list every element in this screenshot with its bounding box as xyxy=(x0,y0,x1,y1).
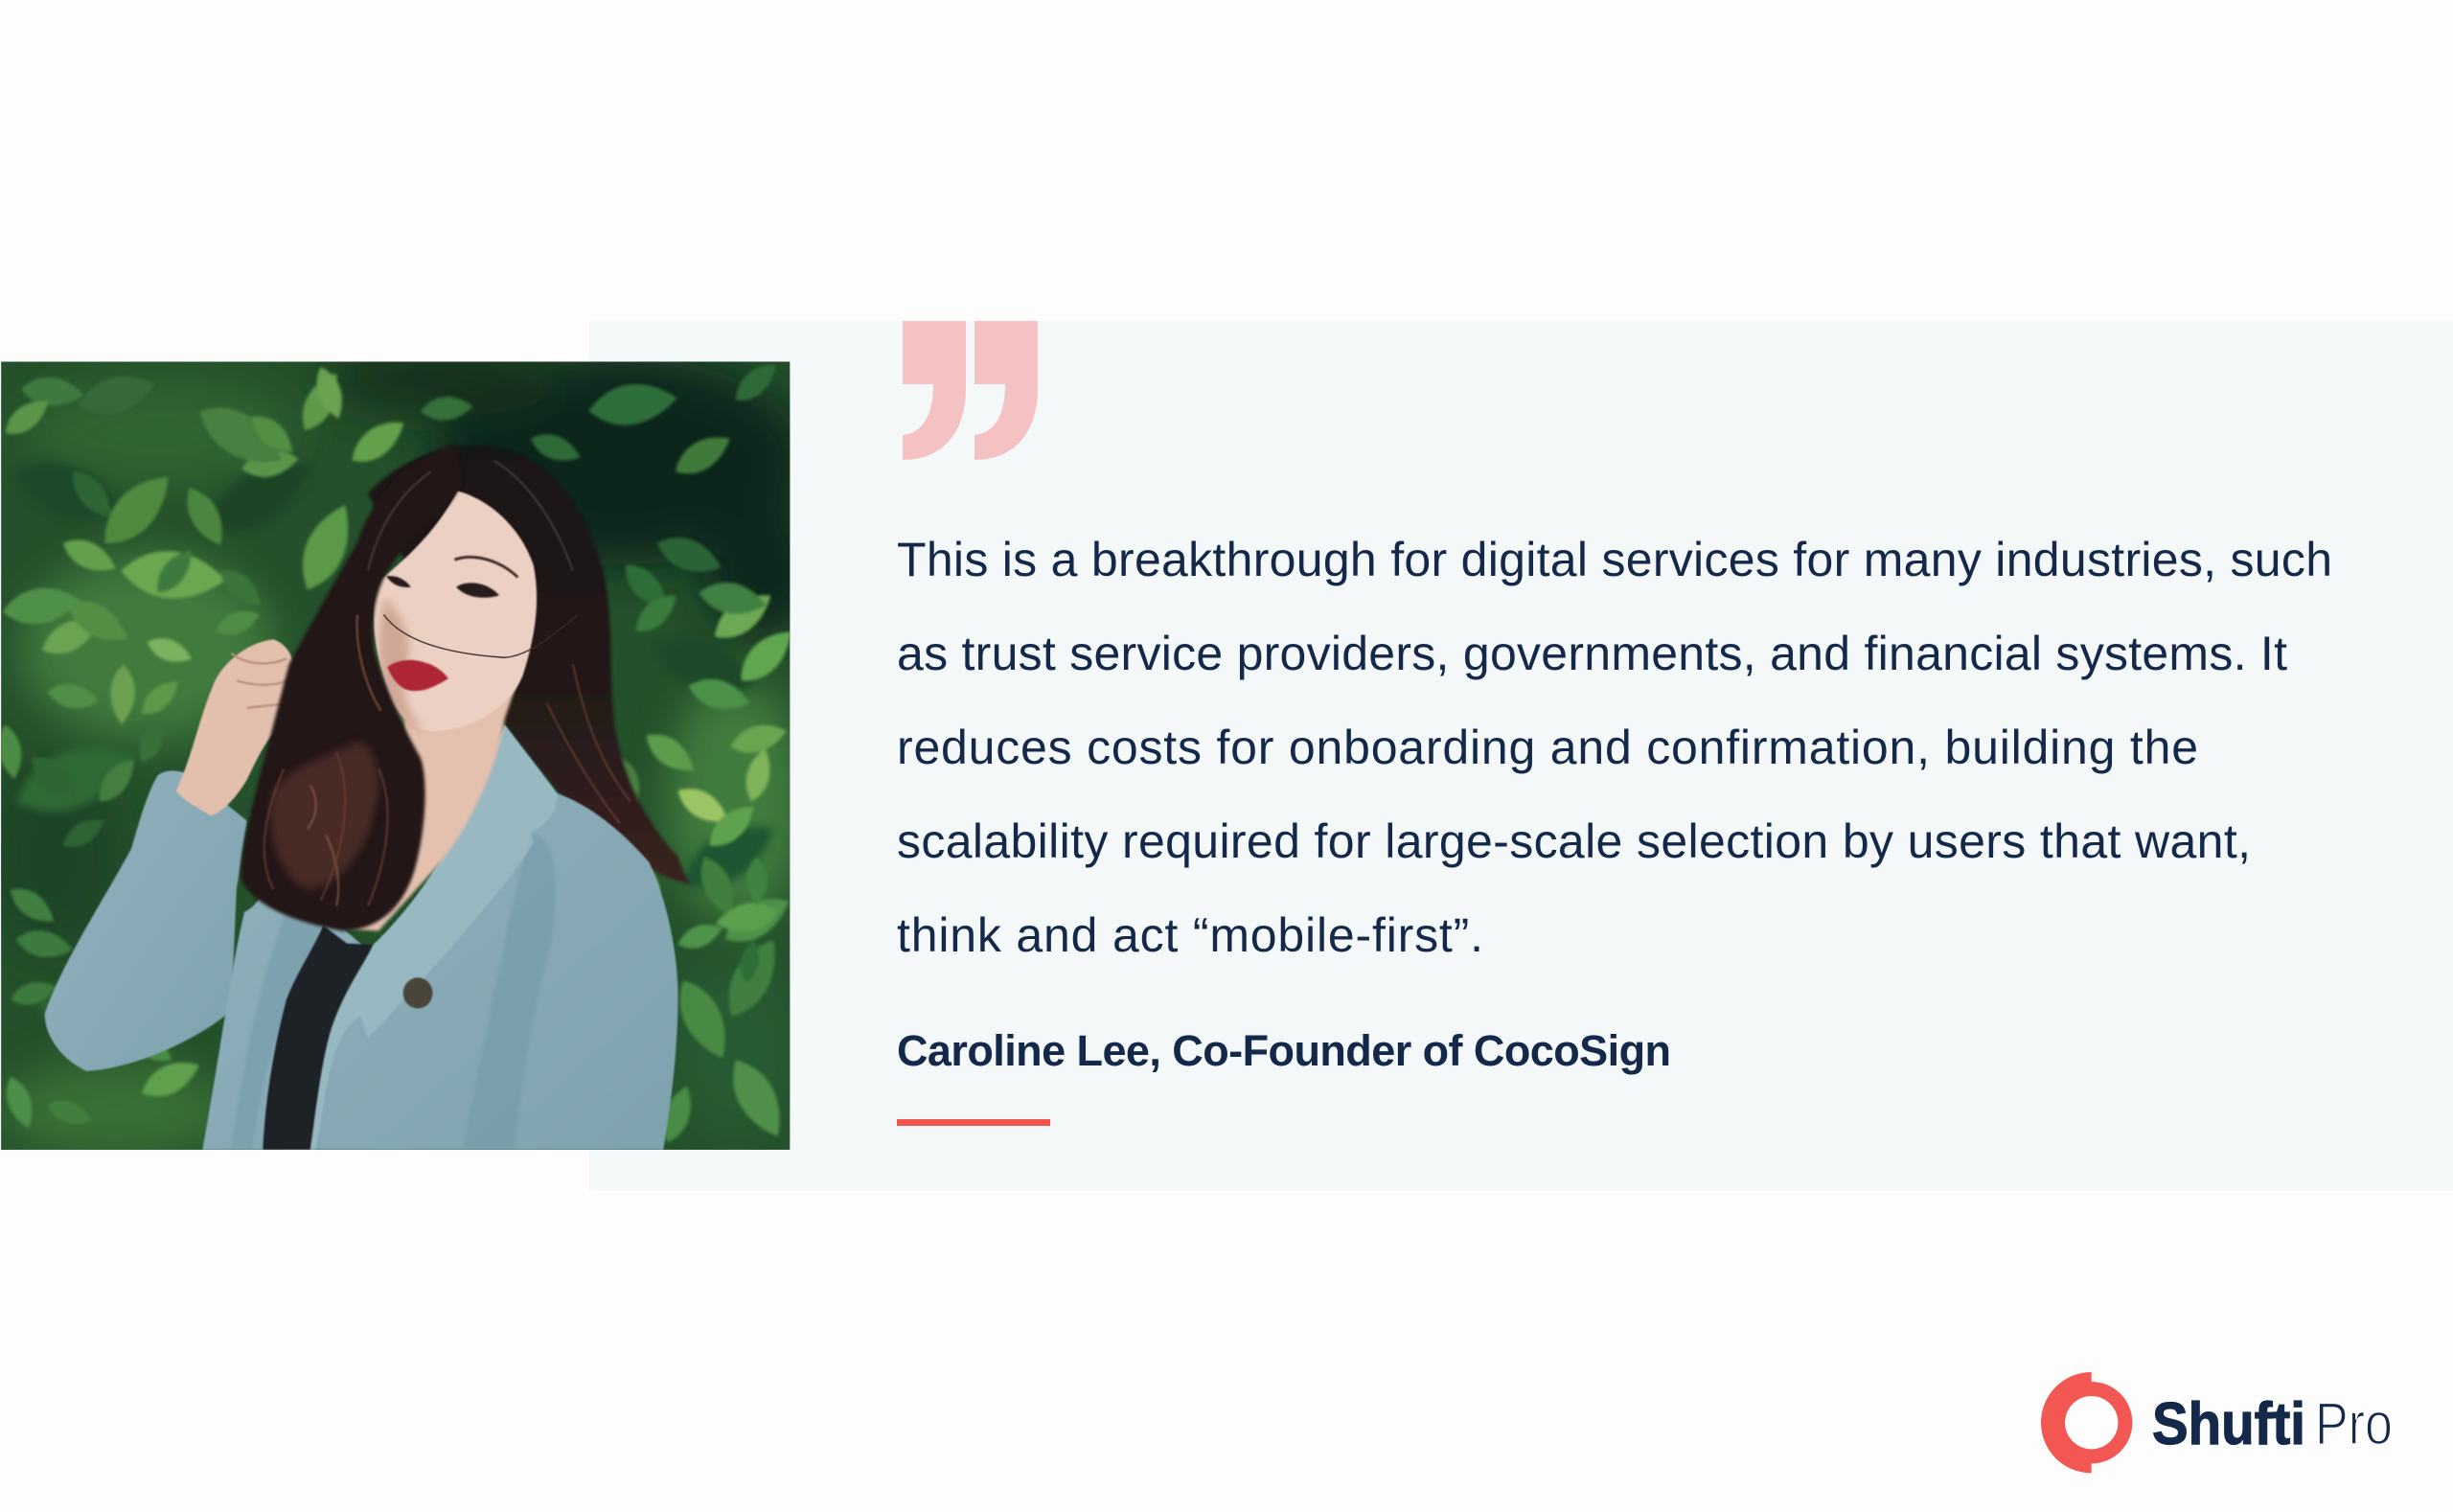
logo wordmark: Pro: Pro xyxy=(2315,1391,2393,1457)
hair strand texture xyxy=(264,461,630,906)
coat button xyxy=(403,977,432,1008)
icon: closing quotation marks xyxy=(903,321,1038,460)
neck and chest xyxy=(336,680,517,930)
quote attribution: Caroline Lee, Co-Founder of CocoSign xyxy=(897,1026,1671,1075)
hand xyxy=(176,639,295,815)
logo mark: red ring xyxy=(2041,1372,2132,1473)
quote text: This is a breakthrough for digital services for many industries, such xyxy=(897,533,2332,586)
hair back xyxy=(368,447,694,884)
foliage leaves xyxy=(0,355,801,1147)
quote text: think and act “mobile-first”. xyxy=(897,908,1483,962)
inner black top xyxy=(263,926,373,1150)
logo: Shufti Pro xyxy=(2041,1372,2393,1473)
coat left sleeve xyxy=(45,770,247,1071)
logo wordmark: Shufti: Shufti xyxy=(2152,1391,2305,1457)
quote text xyxy=(897,533,2332,962)
red accent underline xyxy=(897,1119,1050,1126)
hair front lock xyxy=(241,445,463,930)
photo: woman in blue coat against green foliage xyxy=(0,339,820,1159)
coat body xyxy=(202,724,678,1150)
flyaway hair strand xyxy=(383,614,578,657)
face xyxy=(374,491,537,731)
foliage leaves: shadow layer xyxy=(15,461,776,1015)
coat shading xyxy=(231,835,556,1150)
panel: quote background xyxy=(589,321,2453,1191)
lips xyxy=(387,660,448,691)
quote text: reduces costs for onboarding and confirmation, building the xyxy=(897,721,2198,774)
eyes and brows xyxy=(386,557,517,598)
quote text: as trust service providers, governments, and financial systems. It xyxy=(897,627,2287,680)
quote text: scalability required for large-scale selection by users that want, xyxy=(897,814,2251,868)
